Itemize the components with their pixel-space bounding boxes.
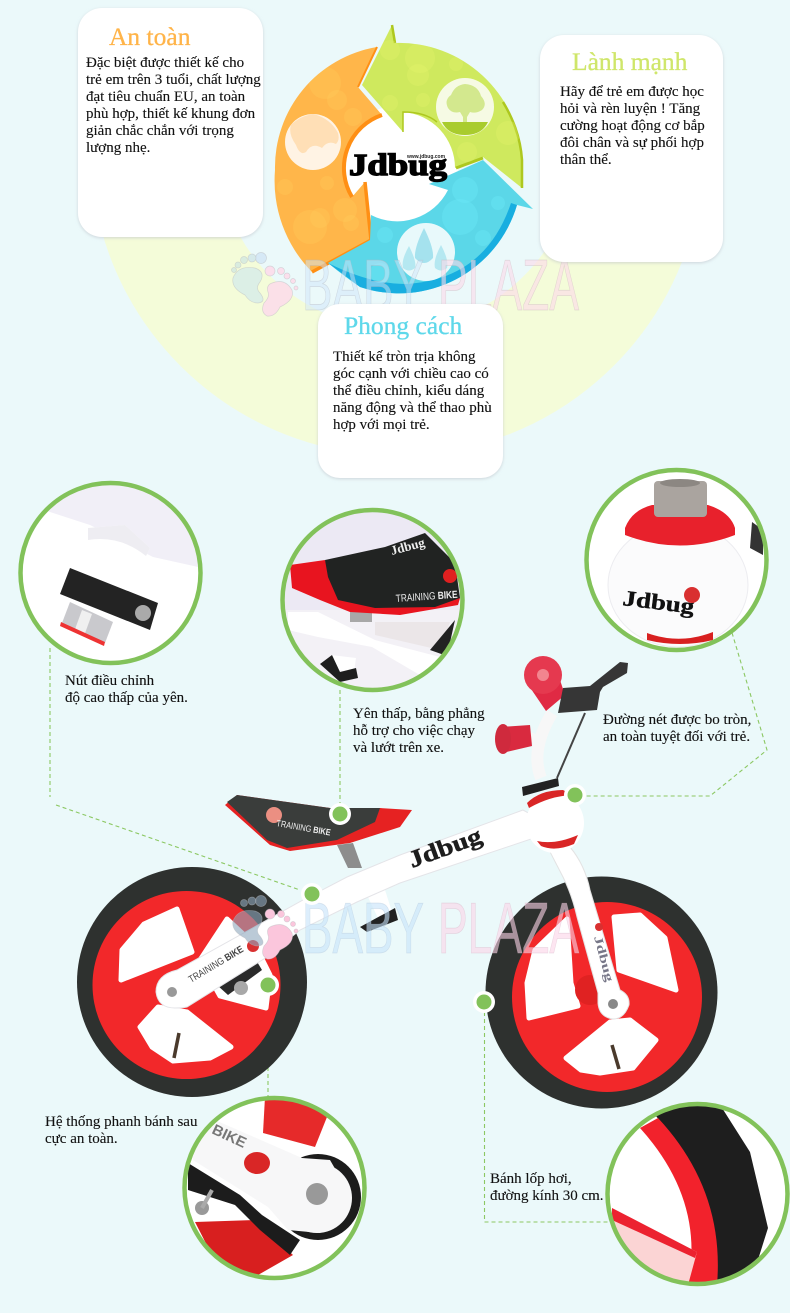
icon: feet — [233, 896, 298, 959]
text block: thể điều chỉnh, kiểu dáng — [333, 383, 485, 399]
caption: tyre: Bánh lốp hơi, — [490, 1171, 572, 1187]
panel: an toan — [78, 8, 263, 237]
text block: phù hợp, thiết kế khung đơn — [86, 106, 256, 122]
text block: trẻ em trên 3 tuổi, chất lượng — [86, 72, 261, 88]
text block: cường hoạt động cơ bắp — [560, 118, 705, 134]
watermark text: BABY — [302, 889, 424, 969]
caption: rounded lines: an toàn tuyệt đối với trẻ. — [603, 729, 750, 745]
frame — [156, 810, 545, 1008]
caption: brake: Hệ thống phanh bánh sau — [45, 1114, 198, 1130]
brake lever — [558, 662, 628, 713]
watermark text — [302, 889, 579, 969]
frame ladybug — [247, 940, 259, 952]
detail circle: rear brake: BIKE — [209, 1121, 249, 1152]
watermark text: BABY — [302, 246, 424, 326]
detail circle: rear brake — [184, 1097, 368, 1281]
watermark text — [302, 246, 579, 326]
caption: saddle: Yên thấp, bằng phẳng — [353, 706, 485, 722]
detail circle: seat clamp — [19, 482, 203, 666]
text block: Đặc biệt được thiết kế cho — [86, 55, 244, 71]
text block: đôi chân và sự phối hợp — [560, 135, 704, 151]
watermark top — [232, 246, 579, 326]
frame label: TRAINING BIKE — [187, 944, 246, 986]
detail circle: saddle: Jdbug — [389, 534, 427, 558]
icon: tree — [436, 78, 494, 136]
saddle — [225, 795, 412, 851]
heading: Phong cách — [344, 311, 463, 340]
caption: rounded lines: Đường nét được bo tròn, — [603, 712, 751, 728]
arrow: orange — [275, 47, 382, 272]
text block — [560, 84, 705, 168]
text block: hỏi và rèn luyện ! Tăng — [560, 101, 701, 117]
handlebar crossbar — [520, 732, 542, 742]
caption: seat height: độ cao thấp của yên. — [65, 690, 188, 706]
panel: phong cach — [318, 304, 503, 478]
connector lines — [50, 626, 767, 1222]
front wheel — [486, 876, 718, 1108]
text block: Thiết kế tròn trịa không — [333, 349, 476, 365]
panel: lanh manh — [540, 35, 723, 262]
pale yellow ring — [104, 237, 682, 445]
watermark text: PLAZA — [438, 246, 579, 326]
caption: seat height: Nút điều chỉnh — [65, 673, 155, 689]
caption: brake: cực an toàn. — [45, 1131, 118, 1147]
caption: tyre — [490, 1171, 604, 1204]
caption: saddle: và lướt trên xe. — [353, 740, 444, 756]
seat post — [337, 843, 362, 868]
caption: brake — [45, 1114, 198, 1147]
text block: hợp với mọi trẻ. — [333, 417, 430, 433]
logo: Jdbug — [349, 147, 448, 182]
text block — [333, 349, 492, 433]
saddle: TRAINING BIKE — [276, 818, 332, 838]
white centre — [338, 106, 458, 226]
rear wheel — [77, 867, 307, 1097]
fork — [548, 847, 629, 1019]
detail circle: saddle: TRAINING BIKE — [395, 589, 458, 605]
hotspot dots — [257, 784, 586, 1013]
text block: góc cạnh với chiều cao có — [333, 366, 489, 382]
caption: saddle: hỗ trợ cho việc chạy — [353, 723, 476, 739]
caption: tyre: đường kính 30 cm. — [490, 1188, 604, 1204]
icon: feet — [232, 252, 298, 316]
watermark lower — [233, 889, 579, 969]
text block: giản chắc chắn với trọng — [86, 123, 234, 139]
icon: water drops — [397, 223, 455, 281]
text block: năng động và thể thao phù — [333, 400, 492, 416]
text block: đạt tiêu chuẩn EU, an toàn — [86, 89, 246, 105]
brake — [217, 945, 262, 995]
handlebar stem — [537, 713, 552, 778]
brake cable — [557, 713, 585, 778]
detail circle: saddle — [281, 508, 465, 692]
detail circle: head tube — [585, 470, 769, 654]
head tube — [522, 778, 584, 853]
arrow: green — [362, 25, 522, 188]
arrow: blue — [328, 160, 533, 293]
detail circle: tyre — [607, 1100, 790, 1286]
text block: thân thể. — [560, 152, 612, 168]
caption: seat height — [65, 673, 188, 706]
text block — [86, 55, 261, 156]
rear dropout — [167, 987, 177, 997]
caption: saddle — [353, 706, 485, 756]
bike — [77, 656, 718, 1108]
watermark text: PLAZA — [438, 889, 579, 969]
cycle diagram — [275, 25, 533, 293]
text block: lượng nhẹ. — [86, 140, 150, 156]
fork: Jdbug — [591, 934, 617, 983]
text block: Hãy để trẻ em được học — [560, 84, 704, 100]
frame logo: Jdbug — [405, 823, 485, 874]
heading: An toàn — [109, 22, 191, 51]
caption: rounded lines — [603, 712, 751, 745]
heading: Lành mạnh — [572, 47, 688, 76]
icon: globe — [285, 114, 341, 170]
pedal clamp — [360, 890, 398, 932]
logo: www.jdbug.com — [406, 154, 446, 160]
detail circle: head tube: Jdbug — [621, 585, 696, 619]
handlebar grips — [495, 656, 565, 754]
